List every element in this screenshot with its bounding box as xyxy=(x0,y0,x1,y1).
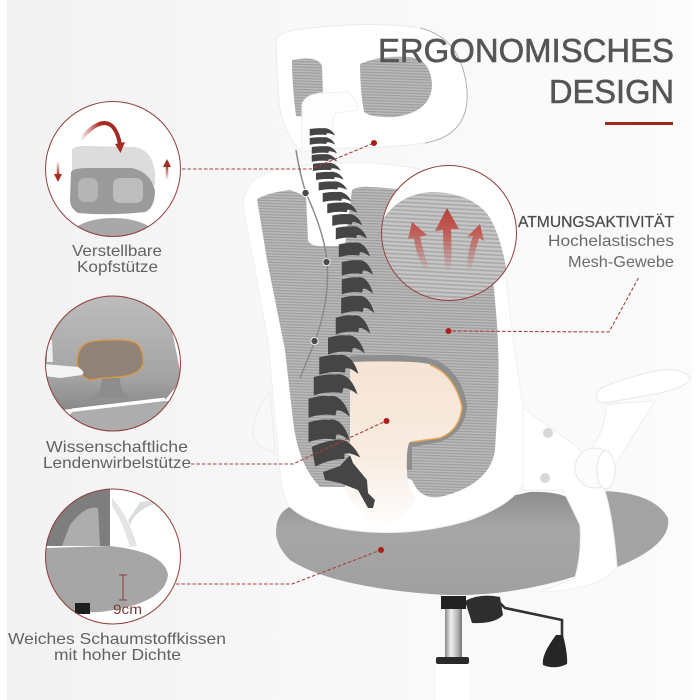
label: foam cushion: Weiches Schaumstoffkissen xyxy=(8,631,226,648)
chair illustration xyxy=(243,24,690,700)
dimension label: 9cm xyxy=(113,602,142,617)
inset: adjustable headrest xyxy=(45,101,181,237)
lumbar support pad xyxy=(345,355,467,528)
backrest frame xyxy=(243,163,528,532)
label: foam cushion: mit hoher Dichte xyxy=(54,647,181,664)
up arrow xyxy=(163,159,171,179)
callout leader lines xyxy=(176,143,639,584)
label: adjustable headrest xyxy=(72,243,162,276)
down arrow xyxy=(54,162,62,182)
arm bracket and hinge xyxy=(523,408,617,592)
headrest xyxy=(276,24,467,152)
armrest xyxy=(575,370,690,489)
title underline xyxy=(605,122,673,125)
spine xyxy=(308,128,375,508)
label: lumbar support: Lendenwirbelstütze xyxy=(43,455,191,472)
left side wing of backrest xyxy=(253,392,275,452)
magnifier: breathable mesh xyxy=(381,165,517,301)
label: lumbar support xyxy=(43,439,191,472)
backrest mesh xyxy=(257,187,499,497)
label: breathability: Mesh-Gewebe xyxy=(568,254,674,271)
seat cushion xyxy=(276,491,668,595)
inset: lumbar support xyxy=(45,296,181,432)
chair base: pole and white column xyxy=(436,596,469,700)
label: foam cushion xyxy=(8,631,226,664)
title: DESIGN xyxy=(549,73,674,110)
label: breathability: ATMUNGSAKTIVITÄT xyxy=(518,213,674,231)
callout dots xyxy=(371,140,452,553)
label: breathability: Hochelastisches xyxy=(548,233,674,250)
label: lumbar support: Wissenschaftliche xyxy=(46,439,188,456)
label: adjustable headrest: Kopfstütze xyxy=(77,259,158,276)
title: ERGONOMISCHES xyxy=(378,32,674,69)
title xyxy=(378,32,674,110)
height adjustment knob and lever xyxy=(465,596,567,667)
breathing arrows xyxy=(408,208,484,272)
label: adjustable headrest: Verstellbare xyxy=(72,243,162,260)
label: breathability xyxy=(518,213,674,271)
inset: foam cushion xyxy=(44,488,181,624)
headrest support arm xyxy=(302,92,358,152)
spine nerve line with markers xyxy=(296,150,330,378)
height dimension marker xyxy=(119,575,127,600)
rotation arrow xyxy=(80,123,125,153)
sacrum xyxy=(323,455,375,508)
